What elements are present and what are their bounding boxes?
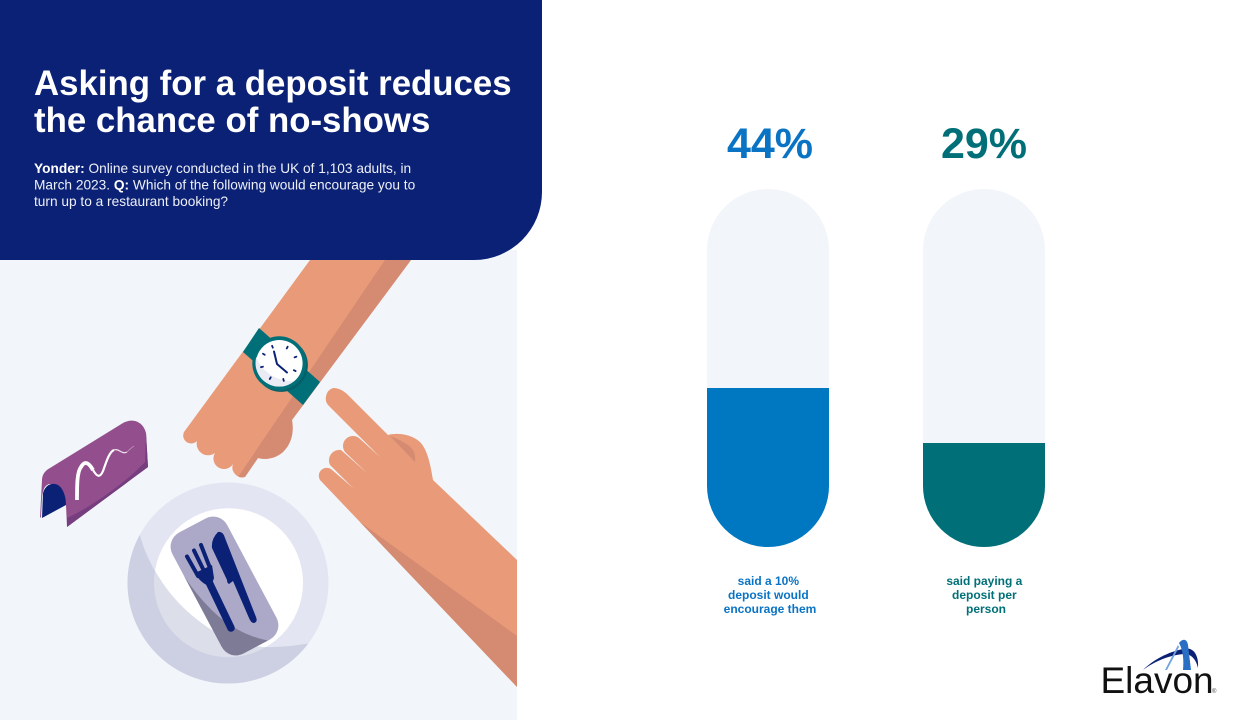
- caption: deposit per person: person: [966, 602, 1006, 616]
- illustration: purple menu card: [40, 421, 148, 527]
- bar: deposit per person: [923, 189, 1045, 547]
- caption: deposit per person: said paying a: [946, 574, 1023, 588]
- stat: 44 percent: 44%: [727, 120, 813, 168]
- title: the chance of no-shows: [34, 101, 430, 140]
- logo: Elavon: ®: [1212, 688, 1217, 695]
- stat: 29 percent: 29%: [941, 120, 1027, 168]
- illustration: plate with cutlery: [128, 482, 328, 684]
- logo: Elavon: [1100, 640, 1217, 701]
- caption: 10% deposit: said a 10%: [738, 574, 799, 588]
- illustration background panel: [0, 250, 517, 720]
- illustration: pointing hand and forearm: [319, 388, 517, 687]
- illustration: arm with wristwatch: [183, 260, 411, 478]
- caption: 10% deposit: deposit would: [728, 588, 809, 602]
- survey description: March 2023. Q: Which of the following would encourage you to: [34, 178, 415, 192]
- bar: 10% deposit: [707, 189, 829, 547]
- caption: 10% deposit: encourage them: [724, 602, 816, 616]
- caption: deposit per person: deposit per: [952, 588, 1017, 602]
- survey description: turn up to a restaurant booking?: [34, 194, 228, 209]
- logo: Elavon: Elavon: [1100, 660, 1214, 701]
- survey description: Yonder: Online survey conducted in the UK of 1,103 adults, in: [34, 161, 411, 176]
- header panel: [0, 0, 542, 260]
- title: Asking for a deposit reduces: [34, 64, 512, 103]
